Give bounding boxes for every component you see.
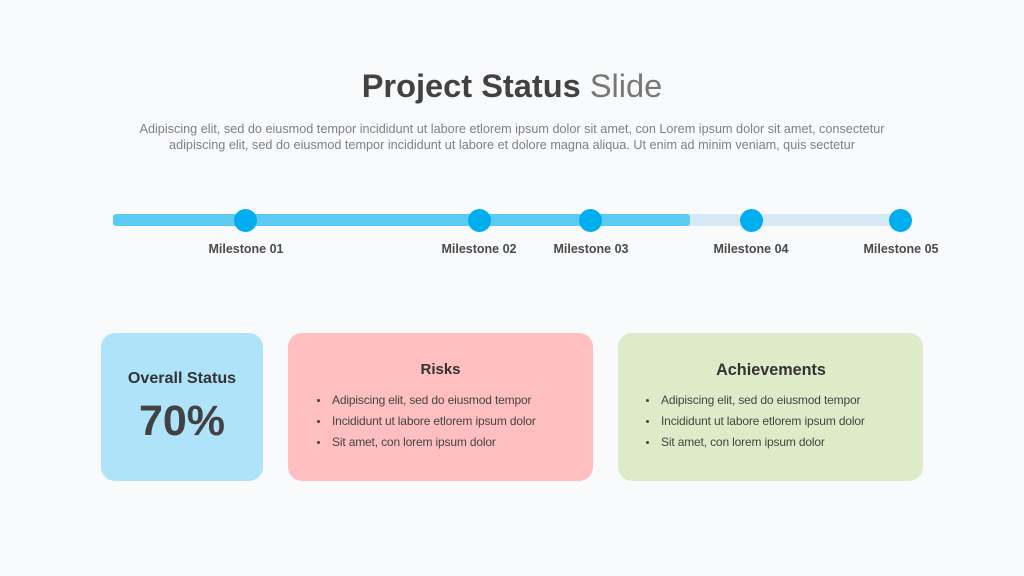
panel: risks: [288, 333, 593, 481]
milestone label 05: Milestone 05: [863, 242, 939, 256]
risks list: Incididunt ut labore etlorem ipsum dolor: [332, 414, 536, 428]
milestone dot 03: [579, 209, 602, 232]
achievements list: Incididunt ut labore etlorem ipsum dolor: [661, 414, 865, 428]
timeline: [113, 209, 939, 256]
achievements list: [646, 392, 865, 449]
risks list: [317, 392, 536, 449]
panel: achievements: [618, 333, 923, 481]
milestone label 04: Milestone 04: [713, 242, 789, 256]
milestone dot 02: [468, 209, 491, 232]
achievements list: Adipiscing elit, sed do eiusmod tempor: [661, 392, 860, 406]
milestone dot 04: [740, 209, 763, 232]
title: Project Status Slide: [362, 67, 662, 104]
overall status heading: Overall Status: [128, 369, 236, 387]
overall status value: 70%: [139, 397, 225, 445]
timeline remaining track: [113, 214, 903, 226]
milestone label 02: Milestone 02: [441, 242, 517, 256]
risks list: Sit amet, con lorem ipsum dolor: [332, 435, 496, 449]
subtitle text: Adipiscing elit, sed do eiusmod tempor incididunt ut labore etlorem ipsum dolor sit amet, con Lorem ipsum dolor sit amet, consectetur: [140, 122, 884, 136]
milestone label 01: Milestone 01: [208, 242, 284, 256]
milestone dot 05: [889, 209, 912, 232]
milestone dot 01: [234, 209, 257, 232]
milestone label 03: Milestone 03: [553, 242, 629, 256]
risks heading: Risks: [420, 360, 461, 378]
timeline progress bar: [113, 214, 690, 226]
risks list: Adipiscing elit, sed do eiusmod tempor: [332, 392, 531, 406]
panel: overall status: [101, 333, 263, 481]
subtitle text: adipiscing elit, sed do eiusmod tempor incididunt ut labore et dolore magna aliqua. Ut enim ad minim veniam, quis sectetur: [169, 138, 855, 152]
achievements list: Sit amet, con lorem ipsum dolor: [661, 435, 825, 449]
achievements heading: Achievements: [716, 360, 826, 378]
subtitle text: [140, 122, 884, 152]
